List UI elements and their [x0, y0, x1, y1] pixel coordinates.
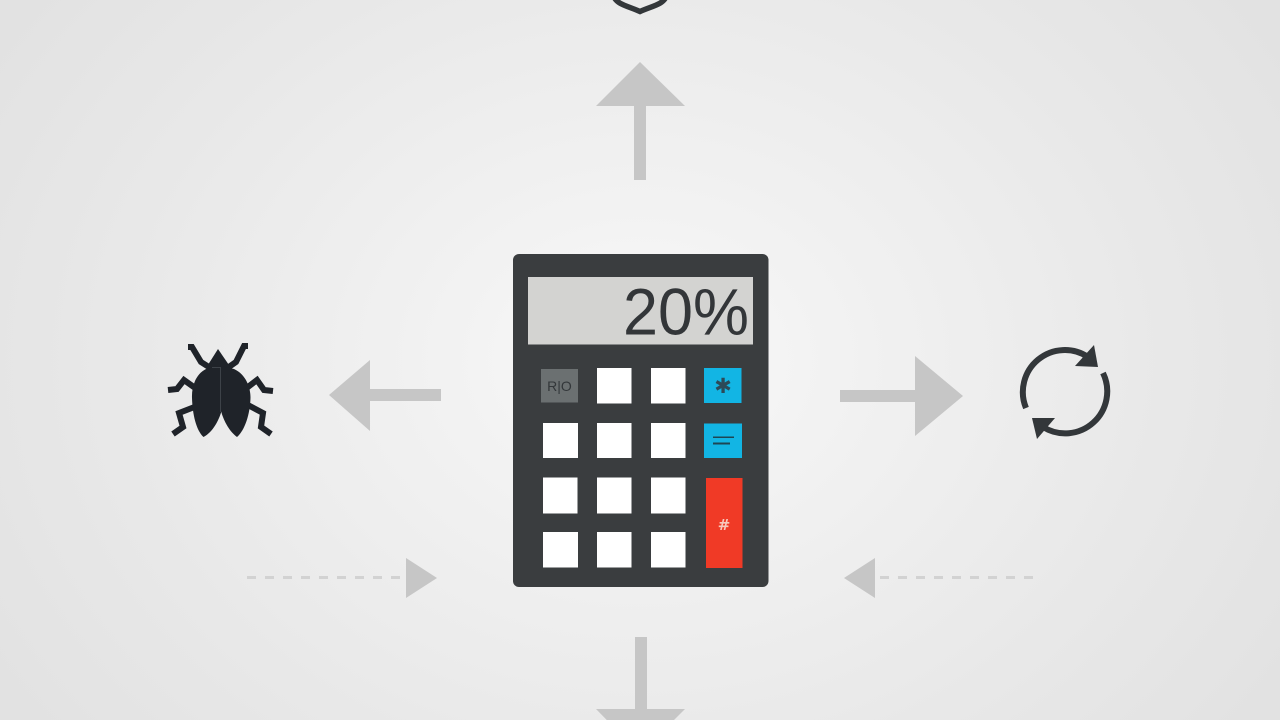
display value: 20% — [623, 274, 749, 348]
bug head — [206, 349, 231, 368]
bug wings — [192, 366, 222, 437]
key: red tall: # — [718, 516, 730, 534]
key: function: R|O — [547, 378, 572, 394]
key: blue multiply — [704, 368, 742, 403]
arrow: left — [329, 360, 441, 431]
white keys — [543, 368, 686, 568]
keypad — [541, 368, 742, 568]
arrow: up — [596, 62, 685, 180]
calculator display — [528, 274, 753, 348]
calculator body — [513, 254, 768, 587]
key: red tall — [706, 478, 742, 568]
arrow: right — [840, 356, 963, 436]
key: function — [541, 369, 578, 402]
key: blue multiply: ✱ — [714, 374, 732, 398]
bug antennae and legs — [168, 346, 273, 434]
sync upper arc — [1023, 350, 1088, 408]
icon: sync arrows — [1023, 345, 1107, 439]
sync lower arrowhead — [1032, 418, 1055, 439]
bug centre line — [212, 368, 220, 412]
icon: bug — [168, 346, 273, 437]
icon: shield (cropped at top edge) — [614, 0, 666, 12]
sync lower arc — [1043, 373, 1107, 433]
arrow: dashed left — [844, 558, 1033, 598]
arrow: dashed right — [247, 558, 437, 598]
arrow: down (cropped at bottom edge) — [596, 637, 685, 720]
key: blue equals — [704, 424, 742, 458]
calculator — [513, 254, 768, 587]
sync upper arrowhead — [1075, 345, 1098, 367]
